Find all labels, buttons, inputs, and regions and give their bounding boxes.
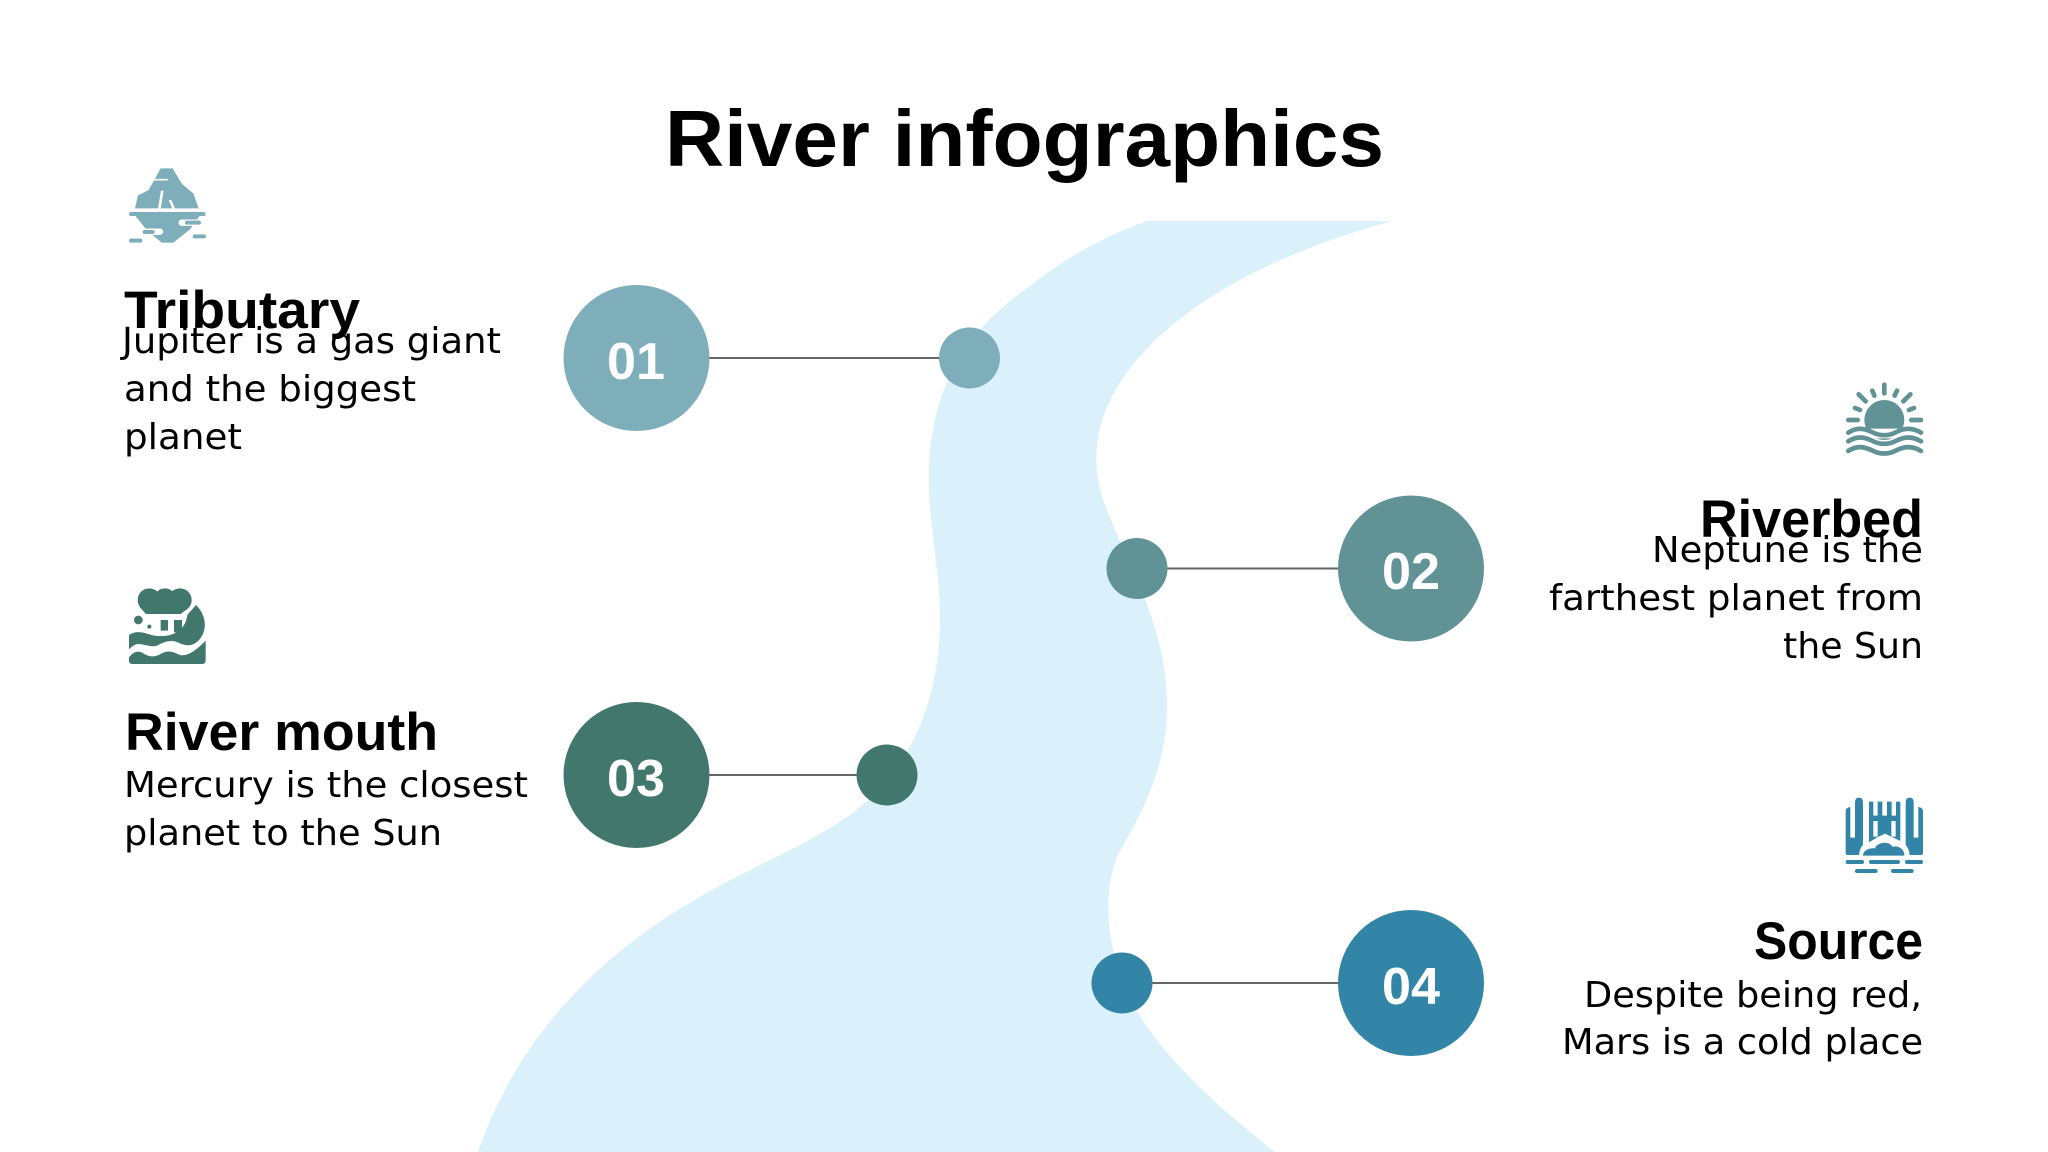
connector 04 xyxy=(1145,982,1340,984)
heading: River mouth: River mouth xyxy=(125,703,438,762)
heading: Tributary: Tributary xyxy=(124,281,361,340)
text: Riverbed description: farthest planet from xyxy=(1549,578,1923,619)
text: Tributary description xyxy=(120,321,501,458)
icon: waterfall xyxy=(1846,798,1923,873)
badge 02 xyxy=(1338,496,1484,642)
panel: 03 river mouth xyxy=(124,588,918,854)
connector 01 xyxy=(700,357,945,359)
badge 03: 03 xyxy=(607,750,665,808)
badge 03 xyxy=(564,702,710,848)
text: Source description xyxy=(1562,975,1923,1063)
icon: sun over water xyxy=(1848,385,1921,453)
text: River mouth description: Mercury is the closest xyxy=(124,765,528,806)
river marker 02 xyxy=(1106,538,1168,599)
text: River mouth description: planet to the Sun xyxy=(124,813,442,854)
heading: Source: Source xyxy=(1754,912,1923,971)
title: River infographics xyxy=(665,94,1384,183)
text: Riverbed description xyxy=(1549,530,1923,667)
connector 03 xyxy=(700,774,865,776)
badge 04: 04 xyxy=(1382,958,1440,1016)
badge 01 xyxy=(564,285,710,431)
connector 02 xyxy=(1160,568,1340,570)
badge 01: 01 xyxy=(607,333,665,391)
text: Source description: Mars is a cold place xyxy=(1562,1022,1923,1063)
panel: 01 tributary xyxy=(120,168,1000,458)
heading: Riverbed: Riverbed xyxy=(1700,490,1923,549)
text: River mouth description xyxy=(124,765,528,854)
badge 04 xyxy=(1338,910,1484,1056)
panel: 04 source xyxy=(1092,798,1923,1063)
text: Tributary description: Jupiter is a gas giant xyxy=(120,321,501,362)
text: Tributary description: and the biggest xyxy=(124,369,416,410)
river marker 01 xyxy=(939,328,1000,388)
river marker 04 xyxy=(1092,952,1152,1014)
river marker 03 xyxy=(856,744,918,806)
text: Source description: Despite being red, xyxy=(1584,975,1922,1016)
river shape xyxy=(478,221,1392,1152)
text: Riverbed description: the Sun xyxy=(1783,626,1923,667)
text: Tributary description: planet xyxy=(124,417,242,458)
text: Riverbed description: Neptune is the xyxy=(1652,530,1923,571)
icon: wave xyxy=(129,588,206,664)
icon: iceberg xyxy=(129,168,206,243)
badge 02: 02 xyxy=(1382,543,1440,601)
panel: 02 riverbed xyxy=(1106,385,1923,667)
